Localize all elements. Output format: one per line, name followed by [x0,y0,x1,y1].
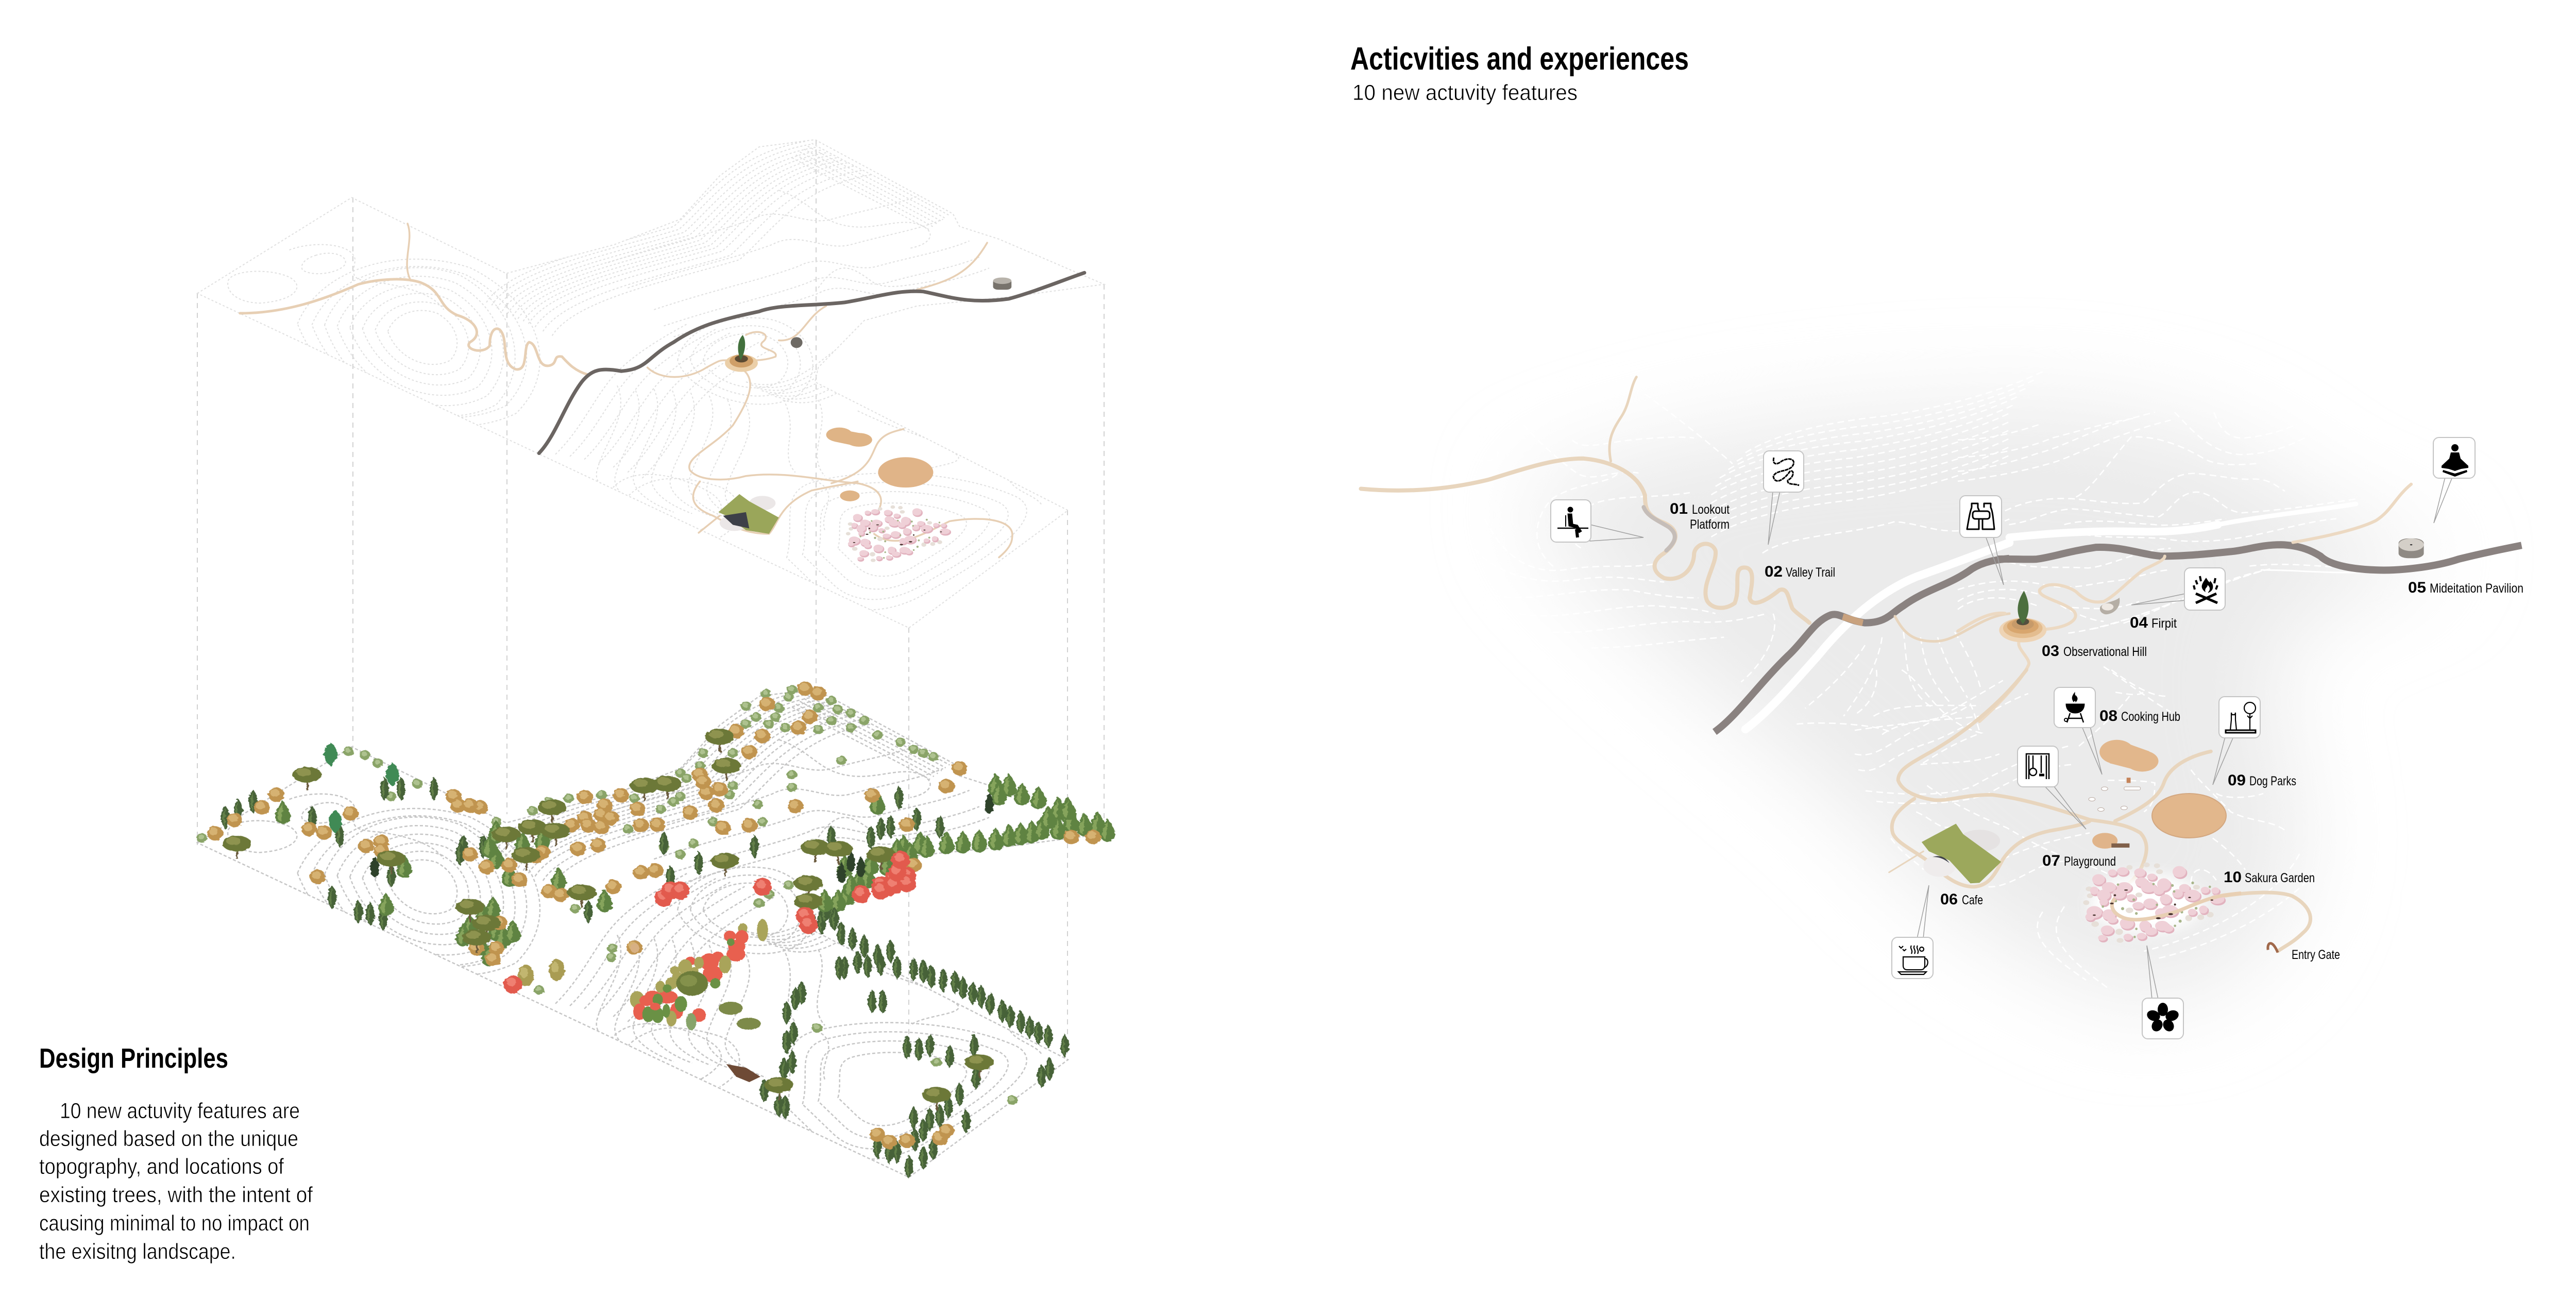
title: Acticvities and experiences [1350,41,1689,77]
icon: swing [2026,754,2049,779]
cooking hub [826,428,872,447]
heading: design principles: Design Principles [39,1043,228,1074]
label: 02 valley trail: 02 [1765,563,1783,580]
label: 01 lookout platform: Platform [1690,517,1730,532]
trails [240,224,1012,558]
feature: firepit [2100,598,2120,614]
feature: playground [2092,833,2129,849]
callout: 01 lookout platform icon [1551,500,1643,542]
road crossing [1843,617,1863,623]
playground [840,491,860,501]
text block: design principles: topography, and locations of [39,1154,284,1179]
icon: fire [2194,576,2217,603]
pavilion [993,277,1011,290]
label: 09 dog parks: Dog Parks [2249,774,2296,788]
label: 08 cooking hub [2099,707,2180,725]
small sakura, top layer [846,506,951,562]
callout: 09 dog park icon [2213,697,2260,785]
label: 09 dog parks: 09 [2228,772,2246,789]
grey terrain wash [1525,407,2452,1001]
text block: design principles: causing minimal to no impact on [39,1211,310,1236]
icon: binoculars [1967,503,1994,529]
label: 01 lookout platform: 01 [1670,500,1688,517]
label: 07 playground: 07 [2042,852,2060,869]
label: 04 firpit [2130,614,2177,631]
icon: grill [2064,693,2084,722]
vertical projection lines [197,140,1104,1053]
label: 10 sakura garden [2224,869,2315,886]
icon: winding trail [1773,458,1799,485]
label: 01 lookout platform [1670,500,1730,532]
callout: 07 playground icon [2018,746,2086,829]
label: 02 valley trail: Valley Trail [1786,565,1835,580]
site map [1361,371,2523,1039]
label: 06 cafe: 06 [1940,891,1958,908]
trees [197,681,1115,1178]
label: 01 lookout platform: Lookout [1692,502,1730,517]
icon: meditating figure [2442,444,2468,477]
feature: sakura garden [2083,863,2241,943]
callout: 08 cooking hub icon [2054,687,2102,774]
text block: design principles: the exisitng landscape. [39,1239,236,1264]
icon: coffee cup [1899,946,1928,974]
white dashed contours south [1855,670,2314,988]
feature: cooking hub [2089,740,2159,811]
white dashed contours west [1468,371,2044,735]
label: 06 cafe: Cafe [1962,893,1983,907]
feature: meditation pavilion [2399,538,2424,558]
callout: 02 valley trail icon [1764,451,1804,545]
label: 06 cafe [1940,891,1983,908]
callout: 10 sakura icon [2142,946,2183,1039]
bottom layer contours [197,689,1104,1177]
label: 10 sakura garden: Sakura Garden [2245,871,2315,885]
label: 09 dog parks [2228,772,2296,789]
cafe [718,494,779,534]
white river band [1745,504,2368,729]
label: 02 valley trail [1765,563,1835,580]
icon: cherry blossom [2145,1003,2180,1033]
callout: 04 firepit icon [2131,568,2225,610]
top layer contours [197,140,1104,628]
brown clearing [726,1064,760,1082]
top layer: activities on terrain [197,140,1104,628]
firepit [791,337,803,348]
label: 03 observational hill: 03 [2042,643,2059,660]
label: 07 playground: Playground [2064,854,2116,869]
feature: observational hill [1999,591,2046,643]
text block: design principles [39,1099,313,1264]
white dashed contours east [1958,412,2356,712]
label: 05 mideitation pavilion [2408,579,2523,596]
label: entry gate: Entry Gate [2292,948,2340,962]
text block: design principles: 10 new actuvity features are [60,1099,300,1123]
label: 10 sakura garden: 10 [2224,869,2242,886]
bottom layer: existing trees on terrain [197,681,1115,1178]
callout: 05 meditation icon [2433,437,2475,523]
label: 04 firpit: Firpit [2151,616,2177,631]
dog park [878,457,933,487]
top layer paths and features [240,224,1084,558]
label: 04 firpit: 04 [2130,614,2148,631]
label: 05 mideitation pavilion: 05 [2408,579,2426,596]
road [539,273,1084,453]
subtitle: 10 new actuvity features [1352,80,1578,105]
label: 03 observational hill [2042,643,2147,660]
text block: design principles: designed based on the unique [39,1126,298,1151]
label: 08 cooking hub: Cooking Hub [2121,710,2180,724]
trails [1361,377,2411,951]
label: 05 mideitation pavilion: Mideitation Pavilion [2430,581,2523,596]
label: 08 cooking hub: 08 [2099,707,2117,725]
feature: entry gate [2268,944,2278,952]
label: 07 playground [2042,852,2116,869]
feature: cafe [1922,823,2001,883]
red and olive tree cluster [630,919,768,1030]
callout: 06 cafe icon [1892,885,1933,979]
text block: design principles: existing trees, with the intent of [39,1183,313,1207]
icon: seated person [1557,507,1588,537]
label: 03 observational hill: Observational Hill [2063,645,2147,659]
feature: dog park [2152,794,2226,838]
observation hill [725,335,758,372]
callout: 03 observational hill icon [1960,496,2004,585]
icon: dog and tree [2226,702,2256,733]
road [1715,545,2521,732]
